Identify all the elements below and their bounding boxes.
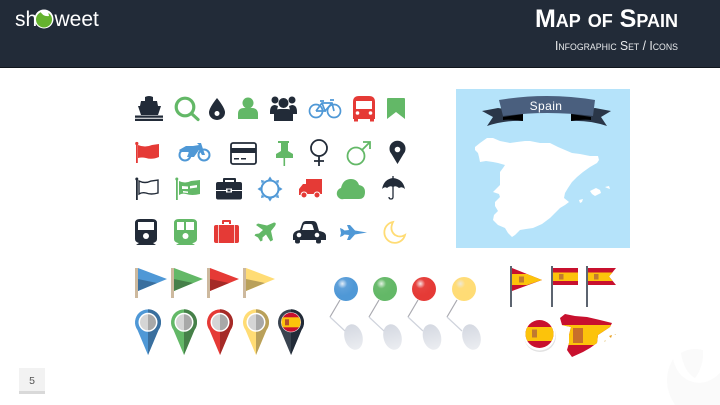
subtitle: Infographic Set / Icons [555,39,678,53]
panel: map of Spain [456,89,630,248]
icon: water drop [209,98,225,120]
icon: cloud [337,179,365,199]
icon: motorbike [179,143,210,160]
icon: truck [299,179,322,198]
pennant: red [207,268,239,298]
pin: green [171,309,197,355]
title: Map of Spain [535,5,678,33]
pennant flags [135,268,275,298]
icon: ship [135,96,163,121]
Spain outline [475,138,610,237]
Spain map with flag fill [558,313,616,359]
logo: showeet: weet [54,8,99,31]
icon: train [135,219,157,245]
icon: outline flag [135,178,158,200]
icon: umbrella [382,176,405,199]
pennant: blue [135,268,167,298]
push pin: blue [330,277,366,352]
icon: green train [174,219,197,245]
icon: airplane [254,222,276,242]
pennant: yellow [243,268,275,298]
icon: bus [353,96,375,122]
icon: crescent moon [384,222,405,243]
icon: male symbol [348,142,370,164]
icon: green checkered flag [175,178,200,200]
flag: Spanish rectangle [551,266,578,307]
page number box: 5 [29,375,35,387]
header bar [0,0,720,68]
icon: bookmark [387,98,405,119]
icon: map marker [390,141,406,164]
ribbon banner: Spain [530,99,562,113]
Spanish flag badge [524,318,556,352]
round push pins [330,277,484,352]
icon: person [238,98,258,119]
ribbon banner [482,96,611,126]
icon: sun [258,176,282,202]
pennant: green [171,268,203,298]
flag: Spanish pennant [510,266,542,307]
pin: dark with Spanish flag [278,309,304,355]
logo: showeet: sh [15,8,37,31]
icon: car [293,221,326,244]
icon: red flag [135,142,159,163]
push pin: green [369,277,405,352]
icon: credit card [231,143,256,164]
icon: group of people [270,96,297,121]
icon: push pin [276,141,293,166]
icon: fighter jet [340,225,367,240]
push pin: yellow [447,277,484,352]
icon: bicycle [310,100,340,118]
Spanish flags [510,266,616,307]
map pins [135,309,304,355]
icon: red suitcase [214,220,239,243]
pin: blue [135,309,161,355]
watermark logo [667,349,720,405]
icon: magnifying glass [176,98,198,120]
icon: briefcase [216,178,242,200]
flag: Spanish swallowtail [586,266,616,307]
pin: red [207,309,233,355]
icon: female symbol [311,140,327,166]
logo: showeet [15,8,99,31]
page number box [19,368,45,394]
pin: yellow [243,309,269,355]
push pin: red [408,277,444,352]
